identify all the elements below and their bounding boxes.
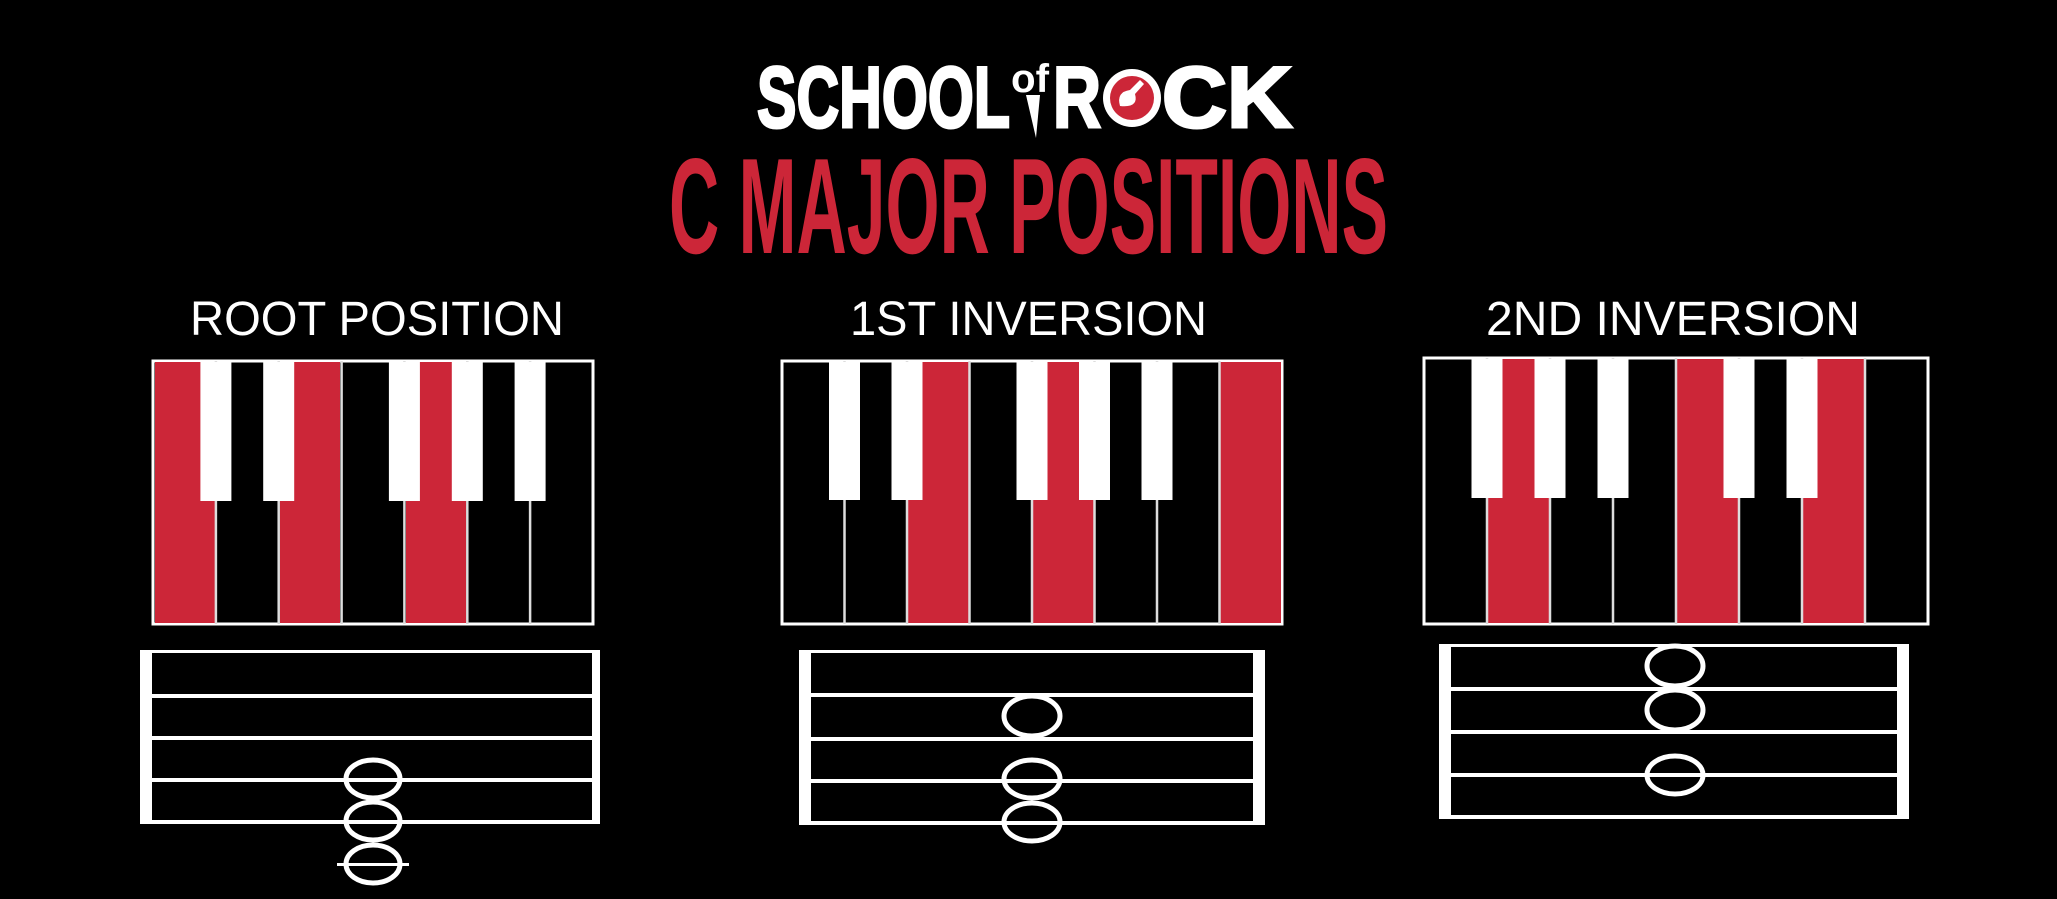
logo: School of Rock: R bbox=[1053, 50, 1101, 146]
heading: root position: ROOT POSITION bbox=[190, 293, 564, 346]
staff: root position bbox=[140, 650, 600, 883]
title: C MAJOR POSITIONS bbox=[669, 130, 1388, 282]
staff: 2nd inversion bbox=[1439, 644, 1909, 819]
keyboard: 2nd inversion bbox=[1424, 358, 1928, 624]
logo: School of Rock: CK bbox=[1162, 50, 1292, 146]
logo: School of Rock: SCHOOL bbox=[757, 50, 1010, 146]
keyboard: root position bbox=[153, 361, 593, 624]
heading: 2nd inversion: 2ND INVERSION bbox=[1486, 293, 1860, 346]
heading: 1st inversion: 1ST INVERSION bbox=[850, 293, 1207, 346]
logo: School of Rock bbox=[757, 50, 1292, 146]
logo: School of Rock: of bbox=[1011, 57, 1050, 101]
staff: 1st inversion bbox=[799, 650, 1265, 841]
keyboard: 1st inversion bbox=[782, 361, 1282, 624]
